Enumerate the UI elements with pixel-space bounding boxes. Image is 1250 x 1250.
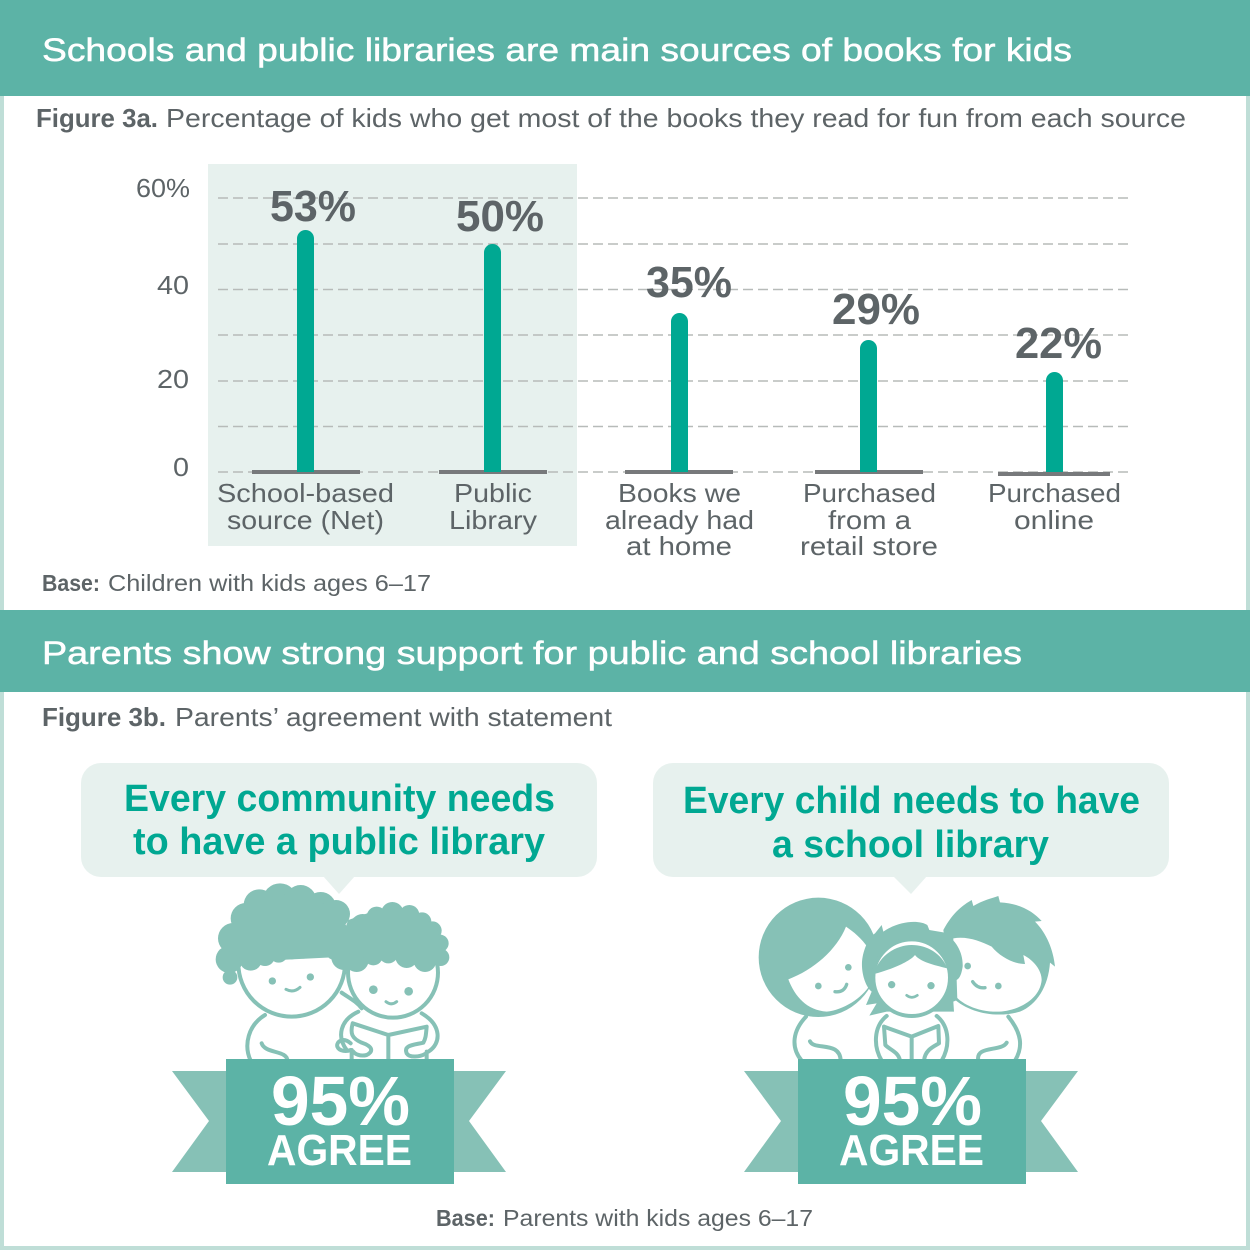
bar chart: book sources: [136, 164, 1132, 561]
base note: children: Base:: [42, 570, 100, 596]
speech bubble: school library: a school library: [772, 824, 1049, 866]
icon: parent and child reading with curly hair: [216, 883, 449, 1061]
value labels: 29%: [832, 285, 920, 334]
baselines: [252, 470, 1110, 476]
category labels: [217, 478, 1121, 561]
category labels: Public: [454, 478, 532, 508]
ribbon: 95% agree school library: AGREE: [839, 1126, 984, 1175]
category labels: source (Net): [227, 505, 384, 535]
base note: parents: Parents with kids ages 6–17: [503, 1205, 813, 1231]
open book: [352, 1023, 427, 1060]
speech bubble: public library: [81, 763, 597, 894]
speech bubble: public library: Every community needs: [124, 778, 555, 820]
mother body: [794, 1017, 841, 1061]
figure 3a caption: Figure 3a.: [36, 103, 158, 133]
bars: [297, 230, 1063, 472]
y axis labels: 20: [157, 364, 189, 394]
ribbon: 95% agree public library: AGREE: [267, 1126, 412, 1175]
highlight panel: school and public library: [208, 164, 577, 546]
value labels: 22%: [1015, 319, 1102, 368]
y axis labels: [136, 173, 190, 482]
boy body: [978, 1017, 1020, 1061]
heading band: parents support: Parents show strong support for public and school libraries: [42, 635, 1022, 671]
parent head: [238, 910, 345, 1017]
speech bubble: public library: to have a public library: [133, 821, 545, 863]
heading band: parents support: [0, 610, 1250, 692]
category labels: Library: [449, 505, 537, 535]
category labels: retail store: [800, 531, 938, 561]
figure 3a caption: Percentage of kids who get most of the books they read for fun from each source: [166, 103, 1186, 133]
value labels: 53%: [270, 182, 356, 231]
child curly hair: [331, 902, 449, 972]
value labels: [270, 182, 1102, 368]
open book: [884, 1026, 939, 1061]
y axis labels: 0: [173, 452, 189, 482]
value labels: 35%: [646, 258, 732, 307]
parent face: [269, 973, 314, 985]
category labels: Books we: [618, 478, 741, 508]
speech bubble: school library: Every child needs to have: [683, 780, 1140, 822]
base note: parents: Base:: [436, 1205, 495, 1231]
heading band: schools and public libraries: Schools and public libraries are main sources of books for kids: [42, 32, 1072, 68]
ribbon: 95% agree school library: 95%: [843, 1062, 982, 1140]
y axis labels: 60%: [136, 173, 190, 203]
girl head: [862, 922, 963, 1016]
ribbon: 95% agree public library: [172, 1059, 506, 1184]
base note: children: Children with kids ages 6–17: [108, 570, 431, 596]
category labels: online: [1014, 505, 1094, 535]
heading band: schools and public libraries: [0, 0, 1250, 96]
ribbon: 95% agree public library: 95%: [271, 1062, 410, 1140]
speech bubble: school library: [653, 763, 1169, 894]
category labels: already had: [605, 505, 754, 535]
category labels: School-based: [217, 478, 394, 508]
child head: [348, 928, 438, 1018]
parent curly hair: [216, 883, 350, 985]
category labels: Purchased: [803, 478, 936, 508]
girl body: [876, 1016, 947, 1061]
category labels: from a: [828, 505, 912, 535]
child body: [337, 1012, 438, 1061]
y axis labels: 40: [157, 270, 189, 300]
value labels: 50%: [456, 192, 544, 241]
icon: mother, boy and girl reading: [759, 896, 1055, 1061]
mother head: [759, 898, 878, 1017]
figure 3b caption: Figure 3b.: [42, 702, 166, 732]
child face: [369, 985, 413, 996]
boy head: [943, 896, 1055, 1015]
ribbon: 95% agree school library: [744, 1059, 1078, 1184]
category labels: at home: [626, 531, 732, 561]
parent body: [247, 993, 362, 1061]
category labels: Purchased: [988, 478, 1121, 508]
figure 3b caption: Parents’ agreement with statement: [175, 702, 613, 732]
